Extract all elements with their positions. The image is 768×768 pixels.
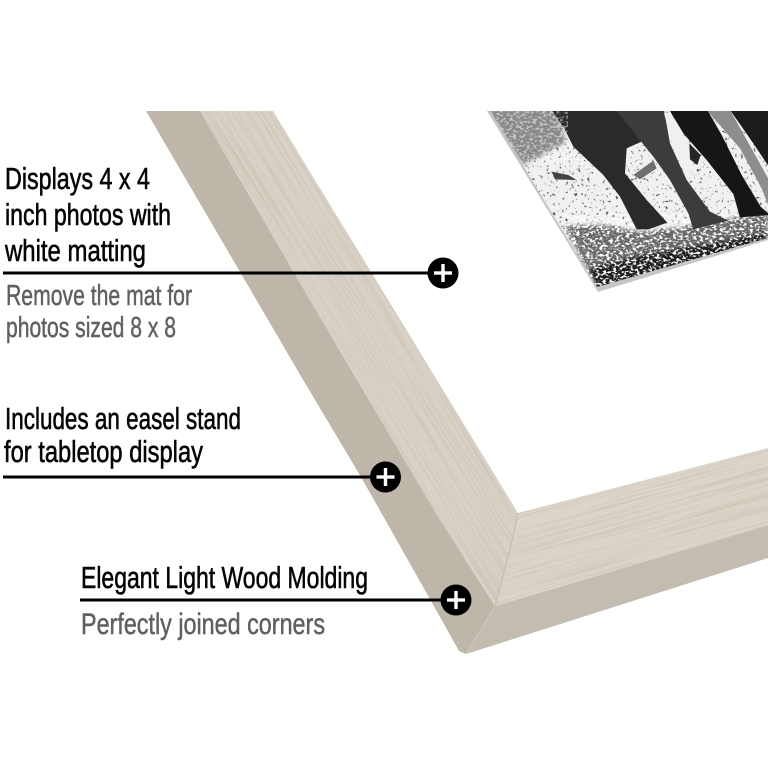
leader line: [3, 476, 378, 478]
callout: easel stand: [3, 402, 401, 492]
mounted photo of elephant legs: [487, 111, 768, 292]
elephant leg one: [552, 110, 667, 229]
note: remove the mat: Remove the mat for: [6, 280, 192, 312]
frame bottom outer side: [466, 525, 768, 654]
plus icon: [428, 258, 458, 288]
picture frame corner: [146, 111, 768, 654]
heading: elegant molding: Elegant Light Wood Molding: [81, 560, 368, 595]
bush texture: [487, 108, 568, 165]
white gap between legs: [664, 113, 693, 180]
mitre joint on wood face: [495, 513, 518, 606]
frame left wood face: [200, 111, 518, 606]
plus icon: [440, 584, 472, 616]
heading: tabletop display: for tabletop display: [4, 435, 204, 469]
note: photos sized: photos sized 8 x 8: [6, 312, 176, 344]
mitre line on outer side: [466, 606, 495, 654]
tail tip: [689, 143, 701, 165]
highlight speckle on soil: [565, 214, 768, 290]
elephant leg three: [669, 110, 768, 217]
leader line: [80, 598, 448, 602]
heading: inch photos with: inch photos with: [5, 198, 171, 232]
small stone: [633, 161, 657, 179]
callout: molding: [80, 560, 472, 641]
elephant leg two: [617, 110, 728, 229]
callout: matting: [3, 162, 458, 344]
leader line: [3, 272, 433, 274]
heading: white matting: white matting: [4, 234, 146, 268]
heading: includes easel: Includes an easel stand: [5, 402, 241, 436]
textured trunk: [707, 110, 768, 210]
note: joined corners: Perfectly joined corners: [81, 608, 325, 641]
frame left outer side: [146, 111, 495, 654]
frame bottom wood face: [496, 448, 768, 606]
soil tones: [486, 108, 768, 292]
debris on ground: [552, 172, 577, 180]
plus icon: [370, 462, 401, 492]
ground: [490, 111, 768, 286]
elephant leg four: [730, 110, 768, 168]
photo mat edge: [487, 111, 768, 292]
heading: displays 4 x 4: Displays 4 x 4: [5, 162, 150, 196]
